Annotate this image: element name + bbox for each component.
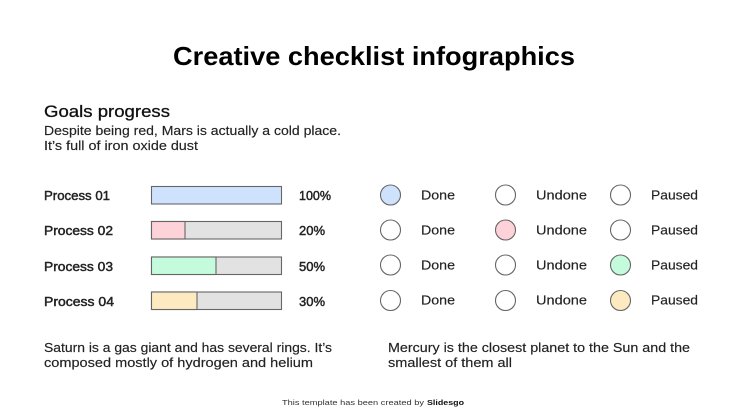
text block: goals description: Despite being red, Mars is actually a cold place.: [44, 124, 341, 138]
checklist row 3: Undone: [536, 258, 587, 272]
checklist row 4: Undone: [536, 294, 587, 308]
heading: goals progress: Goals progress: [44, 102, 170, 121]
text block: saturn: [44, 341, 332, 370]
checklist row 2: Undone: [536, 224, 587, 238]
text block: saturn: composed mostly of hydrogen and helium: [44, 356, 313, 370]
row: process 01: [44, 186, 331, 204]
text block: mercury: smallest of them all: [388, 356, 512, 370]
checklist row 1: Paused: [651, 188, 698, 202]
checklist row 4: Done: [421, 294, 455, 308]
row: process 03: Process 03: [44, 260, 113, 274]
title: Creative checklist infographics: [173, 41, 575, 71]
checklist row 1: Done: [421, 188, 455, 202]
checklist row 4: Paused: [651, 294, 698, 308]
panel: progress bars: [44, 186, 331, 310]
row: process 01: 100%: [299, 189, 331, 203]
row: process 01: Process 01: [44, 189, 110, 203]
text block: goals description: It’s full of iron oxide dust: [44, 139, 199, 153]
row: process 04: [44, 292, 325, 310]
footer credit: Slidesgo: [427, 398, 464, 407]
footer credit: [282, 398, 464, 407]
checklist row 2: Done: [421, 224, 455, 238]
row: process 02: Process 02: [44, 224, 113, 238]
checklist row 1: Undone: [536, 188, 587, 202]
row: process 04: Process 04: [44, 295, 114, 309]
row: process 02: 20%: [299, 224, 325, 238]
panel: status checklist: [380, 185, 698, 310]
checklist row 2: [380, 220, 698, 240]
text block: mercury: [388, 341, 690, 370]
footer credit: This template has been created by: [282, 398, 424, 407]
checklist row 2: Paused: [651, 224, 698, 238]
row: process 03: 50%: [299, 260, 325, 274]
text block: mercury: Mercury is the closest planet to the Sun and the: [388, 341, 690, 355]
row: process 03: [44, 257, 325, 274]
row: process 02: [44, 222, 325, 239]
row: process 04: 30%: [299, 295, 325, 309]
checklist row 1: [380, 185, 698, 205]
text block: goals description: [44, 124, 341, 153]
checklist row 3: [380, 255, 698, 275]
text block: saturn: Saturn is a gas giant and has several rings. It’s: [44, 341, 332, 355]
checklist row 3: Done: [421, 258, 455, 272]
checklist row 4: [380, 290, 698, 310]
checklist row 3: Paused: [651, 258, 698, 272]
